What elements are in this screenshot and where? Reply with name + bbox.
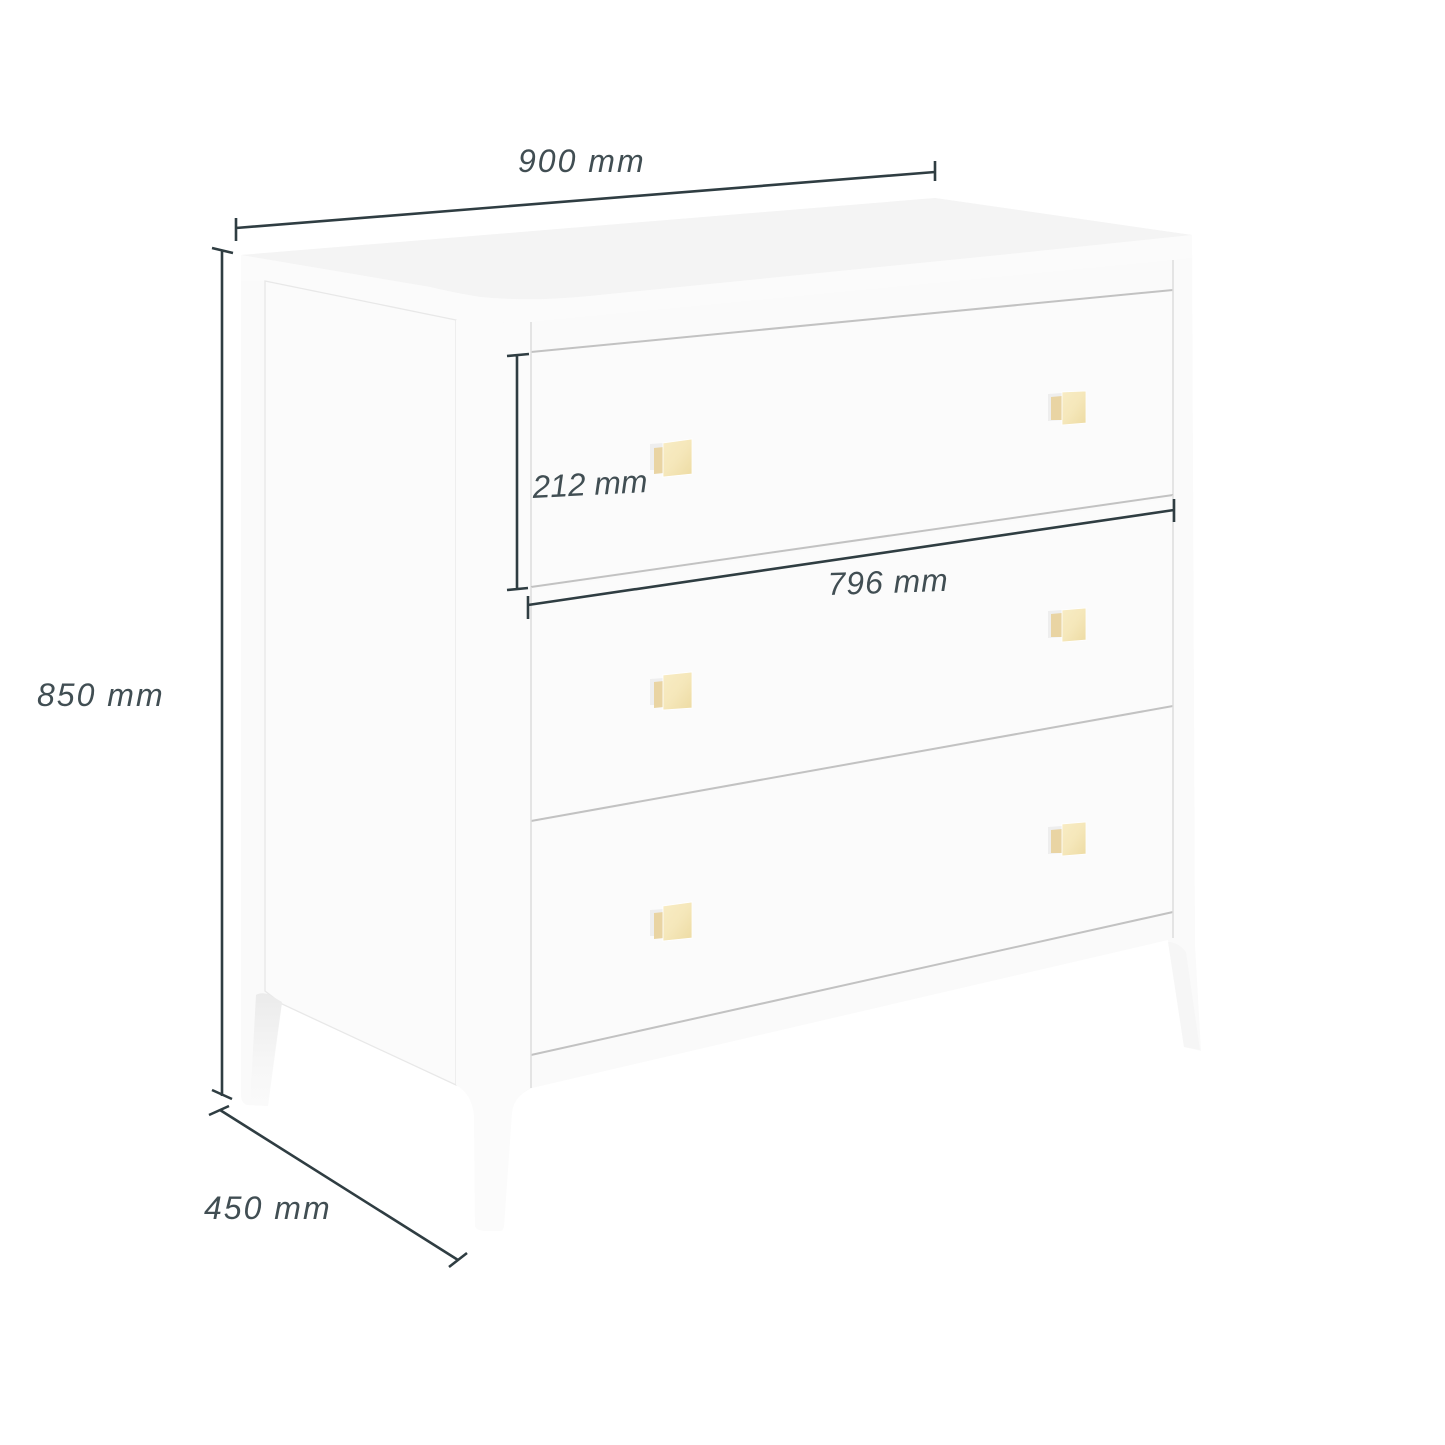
dimension: drawer height 212 mm: [507, 354, 648, 590]
dimension: drawer width 796 mm: [528, 499, 1174, 619]
cabinet body: [241, 198, 1201, 1231]
side panel: [265, 281, 456, 1085]
drawer 2: [531, 495, 1173, 821]
top front edge: [241, 235, 1192, 322]
knob: drawer 3 right: [1048, 822, 1086, 856]
dimension: height 850 mm: 850 mm: [37, 677, 165, 713]
dimension: depth 450 mm: [204, 1106, 467, 1267]
front left post: [456, 320, 530, 1231]
knob: drawer 2 right: [1048, 608, 1086, 642]
knob: drawer 1 left: [650, 439, 692, 477]
back right leg inner face: [1168, 942, 1200, 1050]
dimension: width 900 mm: 900 mm: [518, 143, 646, 179]
back left leg inner face: [250, 993, 282, 1105]
knob: drawer 1 right: [1048, 391, 1086, 425]
knob: drawer 2 left: [650, 672, 692, 710]
drawer 3: [531, 495, 1173, 1088]
dimension: width 900 mm: [236, 143, 935, 241]
drawer 1: [531, 260, 1173, 587]
top surface: [241, 198, 1192, 299]
knob: drawer 3 left: [650, 902, 692, 941]
dimension: drawer height 212 mm: 212 mm: [530, 463, 648, 505]
chest of drawers: [241, 198, 1201, 1231]
dimension: height 850 mm: [37, 248, 233, 1099]
dimension: depth 450 mm: 450 mm: [204, 1190, 332, 1226]
dimension: drawer width 796 mm: 796 mm: [827, 562, 949, 602]
